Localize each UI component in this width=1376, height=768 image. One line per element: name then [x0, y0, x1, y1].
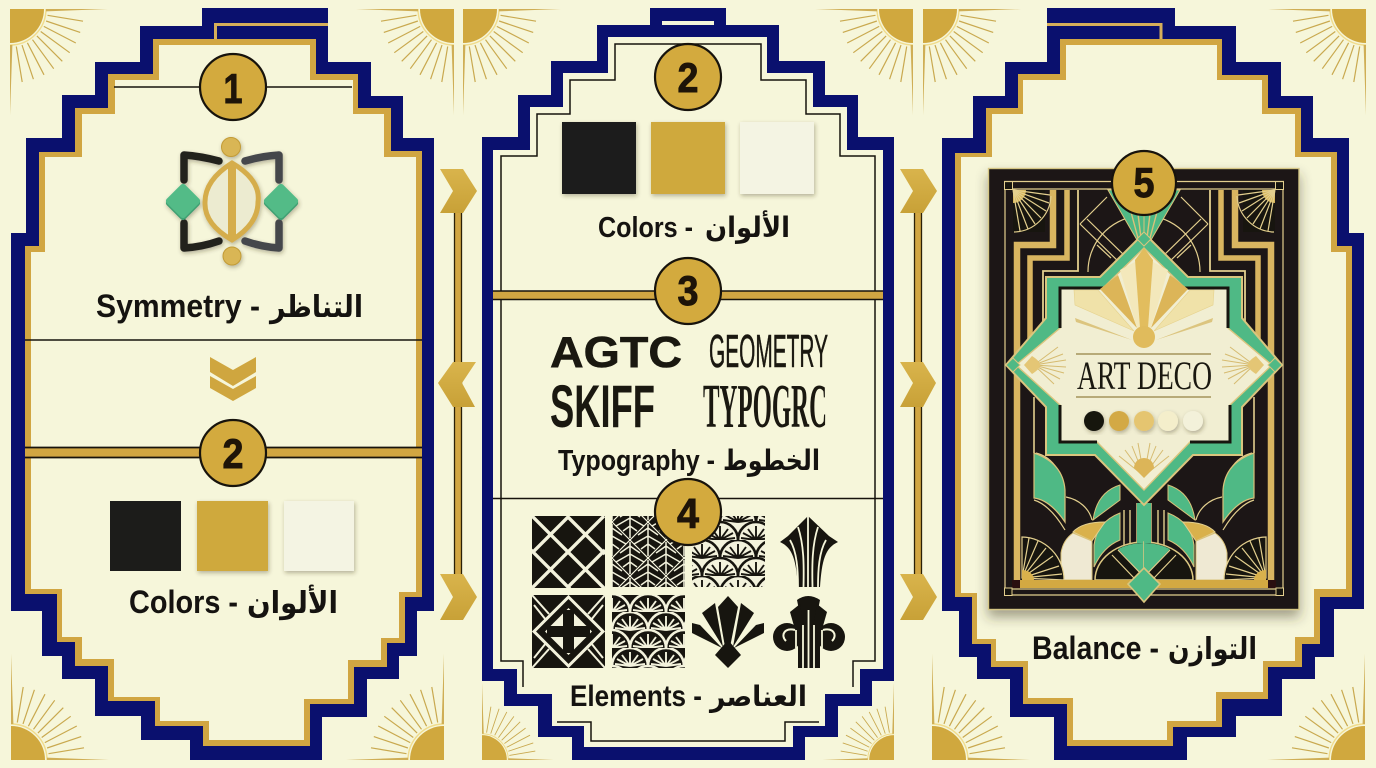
label: typography: الخطوط — [723, 445, 820, 477]
fan centre — [1133, 248, 1155, 478]
tile: dark fan scales — [612, 595, 685, 668]
poster frame ornament left — [1004, 182, 1144, 596]
panel: balance — [942, 8, 1364, 760]
number badge 1: 1 — [224, 65, 242, 112]
art deco poster — [988, 168, 1299, 610]
panel: symmetry and colors — [11, 8, 434, 760]
number badge 5: 5 — [1134, 159, 1154, 206]
icon: symmetry emblem — [165, 138, 299, 265]
fan burst left — [1024, 262, 1144, 476]
panel 1 stepped navy frame — [11, 8, 434, 760]
panel: colors, typography, elements — [482, 8, 894, 760]
label: symmetry — [96, 288, 363, 324]
number badge 5 — [1112, 151, 1176, 215]
tile: light fan scales — [692, 516, 765, 587]
label: colors: الألوان — [705, 210, 790, 244]
label: typography: Typography - — [558, 445, 715, 477]
label: colors — [598, 210, 790, 244]
green tip diamonds — [1006, 232, 1282, 602]
fan burst right — [1144, 262, 1264, 476]
colour swatches — [562, 122, 814, 194]
number badge 3 — [655, 258, 721, 324]
ornament: scroll palm — [773, 596, 845, 668]
label: balance: Balance - — [1032, 630, 1159, 666]
panel: colors, typography, elements: GEOMETRY — [709, 325, 828, 377]
number badge 2 — [200, 420, 266, 486]
typography samples: AGTC — [550, 328, 682, 377]
poster title rules — [1076, 354, 1211, 397]
panel 3 stepped navy frame — [942, 8, 1364, 760]
label: balance — [1032, 630, 1257, 666]
tile: diamond cross — [532, 595, 605, 668]
number badge 4: 4 — [677, 490, 700, 537]
panel 2 stepped navy frame — [482, 8, 894, 760]
cream centre dark edges — [1060, 288, 1230, 442]
tile: leaf pattern — [612, 516, 685, 587]
arrows: connector two — [900, 169, 937, 620]
poster title: ART DECO — [1077, 353, 1212, 398]
number badge 1 — [200, 54, 266, 120]
label: symmetry: Symmetry - — [96, 288, 260, 324]
arrows: connector one — [438, 169, 477, 620]
number badge 2: 2 — [678, 54, 698, 101]
cream centre — [1016, 248, 1272, 490]
typography samples: SKIFF — [550, 373, 655, 440]
chevron arrow down — [210, 357, 256, 401]
colour swatches — [110, 501, 354, 571]
label: colors: الألوان — [247, 584, 338, 620]
poster frame ornament right — [1144, 182, 1284, 596]
label: elements: العناصر — [708, 681, 807, 713]
label: typography — [558, 445, 820, 477]
typography samples — [550, 325, 828, 441]
number badge 3: 3 — [678, 267, 698, 314]
green star band — [1006, 233, 1282, 505]
label: symmetry: التناظر — [268, 291, 363, 324]
poster palette dots — [1084, 411, 1203, 431]
number badge 2 — [655, 44, 721, 110]
label: elements: Elements - — [570, 680, 702, 713]
number badge 2: 2 — [222, 430, 244, 477]
label: colors: Colors - — [598, 212, 693, 244]
poster background — [988, 168, 1299, 610]
divider lines — [25, 87, 422, 458]
ornament: fan and diamond — [692, 596, 764, 668]
decorative element tiles — [530, 516, 845, 668]
ornament: palm stem — [780, 516, 838, 587]
label: elements — [570, 680, 807, 713]
number badge 4 — [655, 479, 721, 545]
label: colors: Colors - — [129, 584, 238, 620]
label: balance: التوازن — [1168, 633, 1257, 666]
divider lines — [493, 291, 883, 498]
label: colors — [129, 584, 338, 620]
tile: diamond lattice — [532, 516, 605, 588]
panel: colors, typography, elements: TYPOGRC — [703, 373, 827, 441]
